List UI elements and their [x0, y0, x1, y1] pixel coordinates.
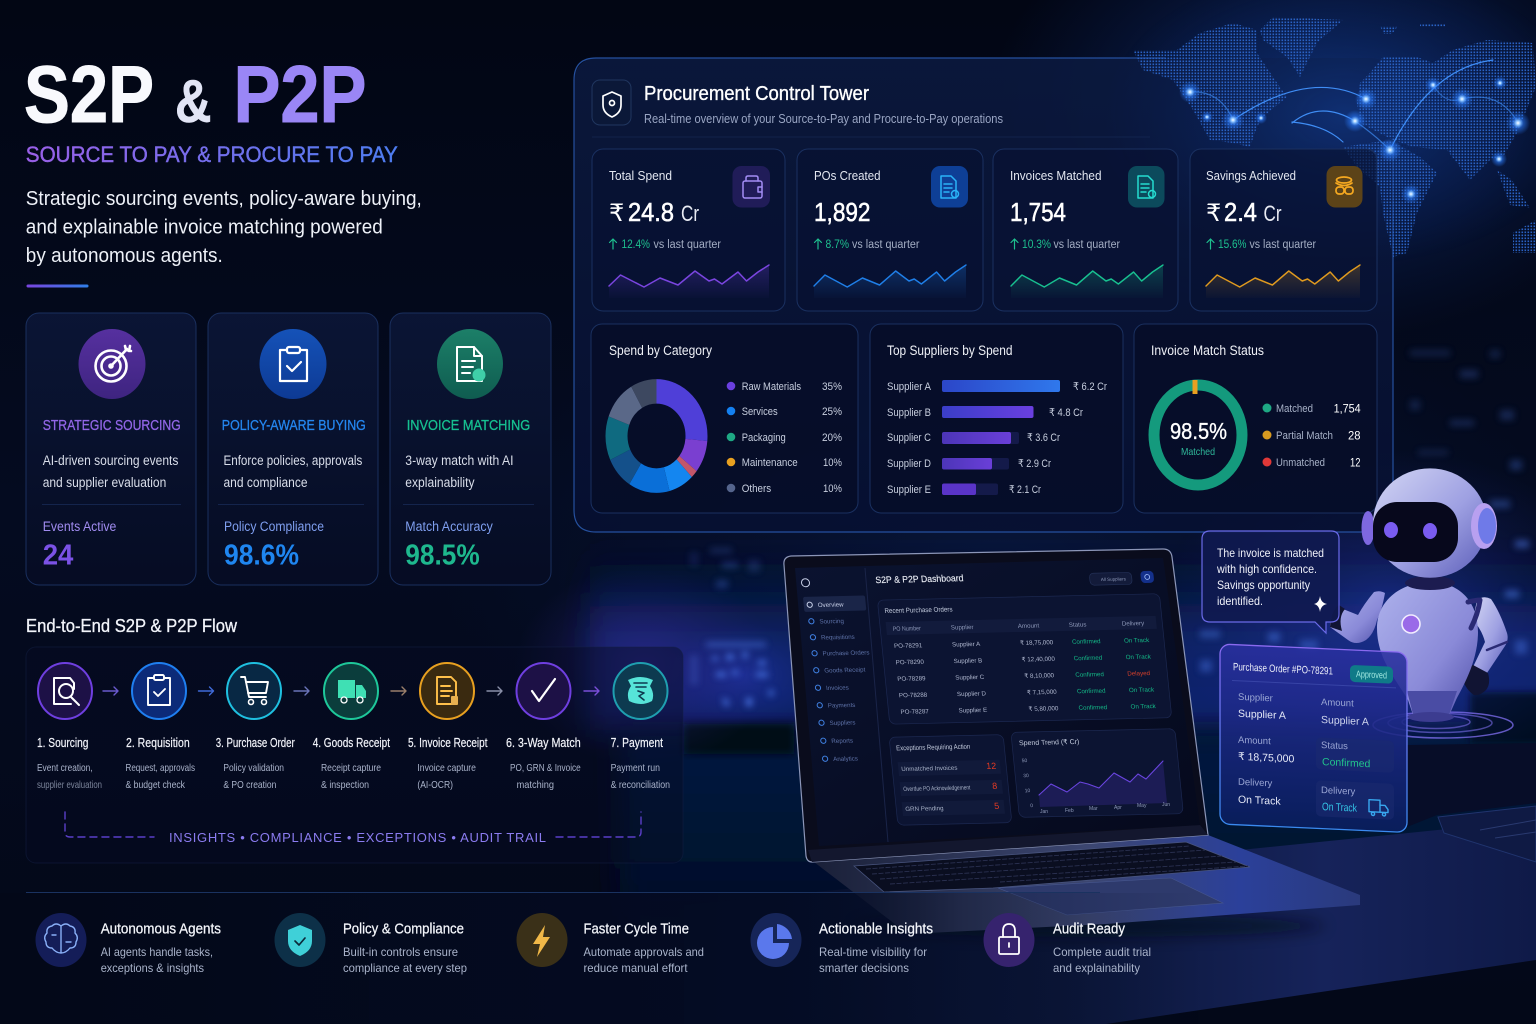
card details: On Track: [1322, 801, 1357, 815]
match legend: [1262, 402, 1361, 470]
card details: Amount: [1238, 735, 1271, 747]
spend trend chart: [1039, 761, 1170, 815]
KPI: total spend: Cr: [681, 201, 699, 226]
benefit: autonomous agents: Autonomous Agents: [101, 922, 221, 938]
purchase order card: [1220, 644, 1407, 832]
world map with glowing network: [1105, 0, 1536, 265]
spend trend panel: 50: [1022, 758, 1028, 764]
robot assistant: [1330, 468, 1513, 738]
card details: Supplier: [1238, 692, 1273, 704]
spend trend chart: Jan: [1040, 809, 1048, 815]
icon: sparkle: [1314, 596, 1327, 612]
sidebar nav: [801, 577, 882, 763]
metric: Events Active: [43, 519, 116, 534]
card details: ₹ 18,75,000: [1238, 751, 1294, 765]
recent purchase orders table: Confirmed: [1072, 638, 1101, 646]
recent purchase orders table: Recent Purchase Orders: [884, 606, 953, 615]
metric: [43, 519, 116, 572]
icon: coins: [1326, 166, 1362, 208]
KPI: savings achieved: Cr: [1264, 201, 1282, 226]
sparkline: [609, 265, 769, 298]
legend: Packaging: [742, 432, 786, 444]
KPI: savings achieved: Savings Achieved: [1206, 168, 1296, 183]
laptop screen: [795, 558, 1200, 846]
bar chart: Supplier C: [887, 432, 931, 444]
sidebar nav: Analytics: [833, 756, 858, 763]
benefit: actionable insights: Actionable Insights: [819, 922, 933, 938]
legend: [727, 381, 842, 495]
benefit: audit ready: [984, 913, 1151, 975]
match legend: Unmatched: [1276, 457, 1325, 469]
panel: control tower content: [591, 80, 1377, 513]
card details: Supplier A: [1238, 708, 1286, 722]
step 1 sourcing: supplier evaluation: [37, 779, 102, 791]
sidebar nav: Goods Receipt: [824, 667, 866, 675]
laptop: [784, 549, 1360, 937]
description: [43, 453, 179, 490]
recent purchase orders table: Amount: [1018, 623, 1040, 630]
metric: 98.5%: [405, 540, 480, 572]
KPI: invoices matched: 10.3%: [1022, 239, 1051, 251]
match legend: Partial Match: [1276, 430, 1333, 442]
description: 3-way match with AI: [405, 453, 514, 468]
accent underline: [26, 284, 88, 288]
step 1 sourcing: [37, 663, 102, 791]
match legend: 1,754: [1334, 402, 1361, 416]
recent purchase orders table: PO-78287: [900, 708, 930, 716]
bar chart: [887, 380, 1107, 496]
bar chart: Supplier D: [887, 458, 931, 470]
arrow: [294, 687, 309, 695]
speech bubble: identified.: [1217, 594, 1263, 608]
benefit: autonomous agents: AI agents handle tasks,: [101, 945, 213, 959]
card details: Amount: [1321, 697, 1354, 710]
recent purchase orders table: On Track: [1124, 637, 1150, 645]
legend: Others: [742, 483, 772, 495]
donut chart: [616, 391, 696, 481]
neck: [1405, 576, 1455, 590]
bar chart: ₹ 2.9 Cr: [1018, 458, 1051, 470]
recent purchase orders table: PO-78288: [899, 692, 928, 699]
recent purchase orders table: Delayed: [1127, 670, 1151, 678]
intro paragraph: and explainable invoice matching powered: [26, 216, 383, 238]
arrow: [584, 687, 599, 695]
step 2 requisition: Request, approvals: [126, 762, 195, 774]
panel: top suppliers: [870, 324, 1123, 513]
sparkline: [1011, 265, 1163, 298]
KPI: POs created: [797, 149, 983, 311]
recent purchase orders table: Supplier E: [958, 707, 988, 715]
bar chart: ₹ 3.6 Cr: [1027, 432, 1060, 444]
laptop bezel: [784, 549, 1208, 862]
bar chart: Supplier B: [887, 407, 931, 419]
benefit: audit ready: and explainability: [1053, 961, 1140, 975]
spend trend panel: [1011, 729, 1183, 817]
robot pedestal: [1407, 743, 1536, 827]
legend: 10%: [823, 457, 842, 469]
spend trend panel: 0: [1030, 803, 1034, 809]
tower title: Procurement Control Tower: [644, 83, 869, 105]
exceptions panel: 5: [994, 801, 1000, 811]
sparkline: [1206, 265, 1360, 298]
sidebar nav: Purchase Orders: [822, 650, 870, 658]
spend trend chart: May: [1137, 803, 1147, 809]
recent purchase orders table: PO-78290: [895, 659, 925, 666]
benefit: audit ready: Complete audit trial: [1053, 945, 1151, 959]
panel: strategic sourcing: [26, 313, 196, 585]
exceptions panel: [889, 735, 1012, 825]
benefit: faster cycle time: reduce manual effort: [584, 961, 688, 975]
description: and supplier evaluation: [43, 475, 166, 490]
recent purchase orders table: Supplier: [951, 624, 974, 632]
right arm: [1473, 597, 1508, 673]
step 7 payment: 7. Payment: [611, 736, 663, 750]
bar chart: Supplier A: [887, 381, 932, 393]
benefit: autonomous agents: exceptions & insights: [101, 961, 204, 975]
KPI: total spend: 12.4%: [622, 239, 650, 251]
arrow: [198, 687, 214, 695]
description: and compliance: [224, 475, 308, 490]
sidebar nav: Invoices: [826, 685, 849, 692]
icon: wallet: [732, 166, 770, 208]
subtitle: SOURCE TO PAY & PROCURE TO PAY: [26, 142, 398, 167]
desk surface: [684, 820, 1536, 1024]
step 2 requisition: & budget check: [126, 779, 186, 791]
step 4 goods receipt: Receipt capture: [321, 762, 381, 774]
match legend: Matched: [1276, 403, 1313, 415]
panel: invoice match status: Invoice Match Status: [1151, 343, 1264, 358]
bar chart: ₹ 4.8 Cr: [1049, 407, 1083, 419]
KPI: invoices matched: [993, 149, 1178, 311]
spend trend chart: Feb: [1065, 808, 1074, 814]
exceptions panel: 8: [992, 781, 998, 791]
KPI: invoices matched: Invoices Matched: [1010, 168, 1102, 183]
insights bracket: INSIGHTS • COMPLIANCE • EXCEPTIONS • AUDIT TRAIL: [169, 830, 546, 845]
spend trend chart: Jun: [1162, 802, 1170, 808]
exceptions panel: Overdue PO Acknowledgement: [903, 784, 971, 793]
step 6 three way match: matching: [517, 779, 554, 791]
legend: Services: [742, 406, 778, 418]
description: AI-driven sourcing events: [43, 453, 179, 468]
icon: target: [78, 329, 146, 399]
KPI: total spend: vs last quarter: [654, 239, 721, 251]
step 7 payment: [611, 663, 670, 791]
match legend: 12: [1350, 456, 1361, 470]
step 2 requisition: 2. Requisition: [126, 736, 190, 750]
step 5 invoice receipt: [408, 663, 488, 791]
benefit: faster cycle time: Faster Cycle Time: [584, 922, 689, 938]
step 4 goods receipt: 4. Goods Receipt: [313, 736, 390, 750]
main title: P2P: [234, 50, 366, 140]
step 7 payment: Payment run: [611, 762, 660, 774]
panel: invoice matching: [390, 313, 551, 585]
recent purchase orders table: On Track: [1129, 687, 1155, 694]
icon: document: [437, 329, 503, 399]
card details: Supplier A: [1321, 714, 1369, 728]
KPI: invoices matched: 1,754: [1010, 197, 1066, 227]
sidebar nav: Requisitions: [821, 634, 855, 642]
sidebar nav: Overview: [817, 601, 844, 609]
step 1 sourcing: Event creation,: [37, 762, 93, 774]
KPI: POs created: POs Created: [814, 168, 880, 183]
metric: 98.6%: [224, 540, 299, 572]
card details: Status: [1321, 740, 1348, 752]
intro paragraph: Strategic sourcing events, policy-aware buying,: [26, 187, 422, 210]
benefits strip: [26, 892, 1151, 975]
recent purchase orders table: ₹ 8,10,000: [1024, 672, 1055, 680]
torso: [1377, 582, 1478, 718]
benefit: actionable insights: smarter decisions: [819, 961, 909, 975]
main title: S2P: [24, 50, 154, 140]
benefit: audit ready: Audit Ready: [1053, 922, 1126, 938]
legend: 20%: [822, 432, 842, 444]
benefit: faster cycle time: Automate approvals and: [584, 945, 704, 959]
insights bracket: [65, 812, 641, 845]
main title: &: [175, 68, 212, 135]
arrow: [103, 687, 118, 695]
spend trend chart: Apr: [1114, 805, 1122, 811]
match donut: [1154, 380, 1242, 485]
spend trend panel: Spend Trend (₹ Cr): [1019, 738, 1080, 747]
exceptions panel: 12: [986, 761, 997, 771]
step 3 purchase order: & PO creation: [223, 779, 277, 791]
speech bubble: Savings opportunity: [1217, 578, 1310, 592]
KPI: POs created: vs last quarter: [852, 239, 920, 251]
KPI: POs created: 8.7%: [826, 239, 849, 251]
description: explainability: [405, 475, 475, 490]
recent purchase orders table: ₹ 5,80,000: [1028, 705, 1059, 713]
sidebar nav: Sourcing: [819, 618, 845, 626]
sparkline: [814, 265, 966, 298]
KPI: invoices matched: vs last quarter: [1054, 239, 1120, 251]
recent purchase orders table: PO-78289: [897, 675, 926, 683]
exceptions panel: Unmatched Invoices: [901, 765, 958, 773]
recent purchase orders table: Confirmed: [1078, 704, 1108, 712]
top bar controls: [1089, 571, 1154, 585]
bottom strip fade: [0, 893, 1200, 1024]
recent purchase orders table: ₹ 7,15,000: [1027, 689, 1058, 696]
step 3 purchase order: Policy validation: [223, 762, 284, 774]
benefit: policy and compliance: compliance at every step: [343, 961, 467, 975]
step 3 purchase order: [216, 663, 295, 791]
arrow: [487, 687, 502, 695]
step 5 invoice receipt: Invoice capture: [417, 762, 476, 774]
left arm: [1330, 591, 1385, 643]
heading: INVOICE MATCHING: [407, 418, 530, 434]
recent purchase orders table: ₹ 12,40,000: [1021, 656, 1056, 664]
tower subtitle: Real-time overview of your Source-to-Pay and Procure-to-Pay operations: [644, 112, 1003, 126]
description: Enforce policies, approvals: [224, 453, 363, 468]
description: [224, 453, 363, 490]
speech bubble: The invoice is matched: [1217, 546, 1324, 560]
recent purchase orders table: Confirmed: [1075, 671, 1105, 679]
sidebar nav: Reports: [831, 738, 853, 745]
head: [1362, 468, 1497, 578]
match donut: Matched: [1181, 446, 1215, 458]
recent purchase orders table: ₹ 18,75,000: [1020, 639, 1054, 647]
benefit: policy and compliance: Built-in controls ensure: [343, 945, 458, 959]
benefit: policy and compliance: Policy & Compliance: [343, 922, 464, 938]
panel: spend by category: [591, 324, 858, 513]
recent purchase orders table: [877, 594, 1172, 724]
metric: Match Accuracy: [405, 519, 493, 534]
benefit: actionable insights: Real-time visibility for: [819, 945, 927, 959]
step 6 three way match: [506, 663, 581, 791]
background city lights: [690, 350, 1529, 706]
heading: POLICY-AWARE BUYING: [222, 418, 366, 434]
legend: 25%: [822, 406, 842, 418]
legend: Maintenance: [742, 457, 798, 469]
step 4 goods receipt: & inspection: [321, 779, 369, 791]
recent purchase orders table: On Track: [1125, 654, 1152, 661]
exceptions panel: Exceptions Requiring Action: [896, 744, 971, 752]
panel: top suppliers: Top Suppliers by Spend: [887, 343, 1012, 358]
bar chart: Supplier E: [887, 484, 931, 496]
KPI: total spend: 24.8: [628, 197, 674, 227]
base rings: [1373, 712, 1513, 738]
KPI: savings achieved: 15.6%: [1218, 239, 1246, 251]
speech bubble: [1202, 531, 1339, 633]
legend: 35%: [822, 381, 842, 393]
dashboard ui: [801, 569, 1184, 827]
step 1 sourcing: 1. Sourcing: [37, 736, 88, 750]
recent purchase orders table: Supplier C: [955, 674, 985, 682]
legend: 10%: [823, 483, 842, 495]
step 6 three way match: 6. 3-Way Match: [506, 736, 581, 750]
KPI: total spend: [592, 149, 785, 311]
intro paragraph: [26, 187, 422, 267]
panel: spend by category: Spend by Category: [609, 343, 712, 358]
benefit: faster cycle time: [516, 913, 704, 975]
benefit: policy and compliance: [274, 913, 467, 975]
KPI: savings achieved: [1190, 149, 1377, 311]
laptop base: [814, 835, 1360, 937]
step 5 invoice receipt: 5. Invoice Receipt: [408, 736, 488, 750]
benefit: autonomous agents: [36, 913, 221, 975]
panel: policy-aware buying: [208, 313, 378, 585]
card title: Purchase Order #PO-78291: [1233, 661, 1333, 678]
metric: Policy Compliance: [224, 519, 324, 534]
step 3 purchase order: 3. Purchase Order: [216, 736, 295, 750]
KPI: total spend: ₹: [609, 200, 624, 227]
card details: Confirmed: [1322, 756, 1371, 770]
intro paragraph: by autonomous agents.: [26, 244, 223, 267]
recent purchase orders table: Supplier A: [952, 641, 981, 649]
recent purchase orders table: PO Number: [893, 625, 921, 633]
spend trend panel: 30: [1023, 773, 1029, 779]
card details: Delivery: [1238, 777, 1273, 789]
bar chart: ₹ 2.1 Cr: [1009, 484, 1041, 496]
card details: On Track: [1238, 794, 1281, 808]
recent purchase orders table: Confirmed: [1077, 688, 1106, 695]
step 7 payment: & reconciliation: [611, 779, 670, 791]
KPI: total spend: Total Spend: [609, 168, 672, 183]
panel: control tower background: [574, 58, 1393, 532]
description: [405, 453, 514, 490]
card details: Delivery: [1321, 785, 1356, 798]
main title: [24, 50, 366, 140]
flow heading: End-to-End S2P & P2P Flow: [26, 616, 238, 636]
match legend: 28: [1348, 428, 1361, 442]
metric: 24: [43, 540, 73, 572]
recent purchase orders table: PO-78291: [894, 642, 923, 650]
icon: po document: [931, 166, 968, 208]
arrow: [391, 687, 406, 695]
step 6 three way match: PO, GRN & Invoice: [510, 762, 581, 774]
spend trend panel: 10: [1025, 788, 1031, 794]
chest light: [1402, 615, 1420, 633]
card details: [1238, 692, 1394, 820]
top bar controls: All Suppliers: [1101, 576, 1127, 582]
recent purchase orders table: Delivery: [1122, 620, 1145, 628]
step 4 goods receipt: [313, 663, 390, 791]
recent purchase orders table: Confirmed: [1073, 655, 1103, 662]
second device on desk: [1438, 806, 1536, 862]
approved badge: [1350, 665, 1393, 684]
sidebar nav: Suppliers: [829, 719, 856, 727]
sidebar nav: Payments: [828, 702, 856, 710]
icon: shield: [592, 80, 631, 125]
match donut: 98.5%: [1170, 418, 1227, 444]
recent purchase orders table: On Track: [1130, 703, 1157, 711]
benefit: actionable insights: [750, 913, 933, 975]
recent purchase orders table: Supplier D: [957, 690, 987, 698]
icon: truck: [1369, 800, 1388, 816]
step 2 requisition: [126, 663, 195, 791]
bar chart: ₹ 6.2 Cr: [1073, 381, 1107, 393]
panel: end-to-end flow: [26, 647, 683, 863]
heading: STRATEGIC SOURCING: [43, 418, 181, 434]
metric: [224, 519, 324, 572]
panel: invoice match status: [1134, 324, 1377, 513]
recent purchase orders table: Supplier B: [953, 657, 983, 665]
approved badge: Approved: [1356, 669, 1387, 682]
metric: [405, 519, 493, 572]
KPI: savings achieved: 2.4: [1224, 197, 1257, 227]
dashboard title: S2P & P2P Dashboard: [875, 573, 964, 585]
speech bubble: with high confidence.: [1216, 562, 1317, 576]
spend trend chart: Mar: [1089, 806, 1098, 812]
KPI: savings achieved: ₹: [1206, 200, 1221, 227]
legend: Raw Materials: [742, 381, 802, 393]
exceptions panel: GRN Pending: [905, 805, 944, 813]
icon: matched document: [1128, 166, 1164, 208]
KPI: POs created: 1,892: [814, 197, 870, 227]
step 5 invoice receipt: (AI-OCR): [417, 779, 453, 791]
recent purchase orders table: Status: [1069, 621, 1087, 629]
KPI: savings achieved: vs last quarter: [1250, 239, 1316, 251]
icon: clipboard: [260, 329, 326, 399]
